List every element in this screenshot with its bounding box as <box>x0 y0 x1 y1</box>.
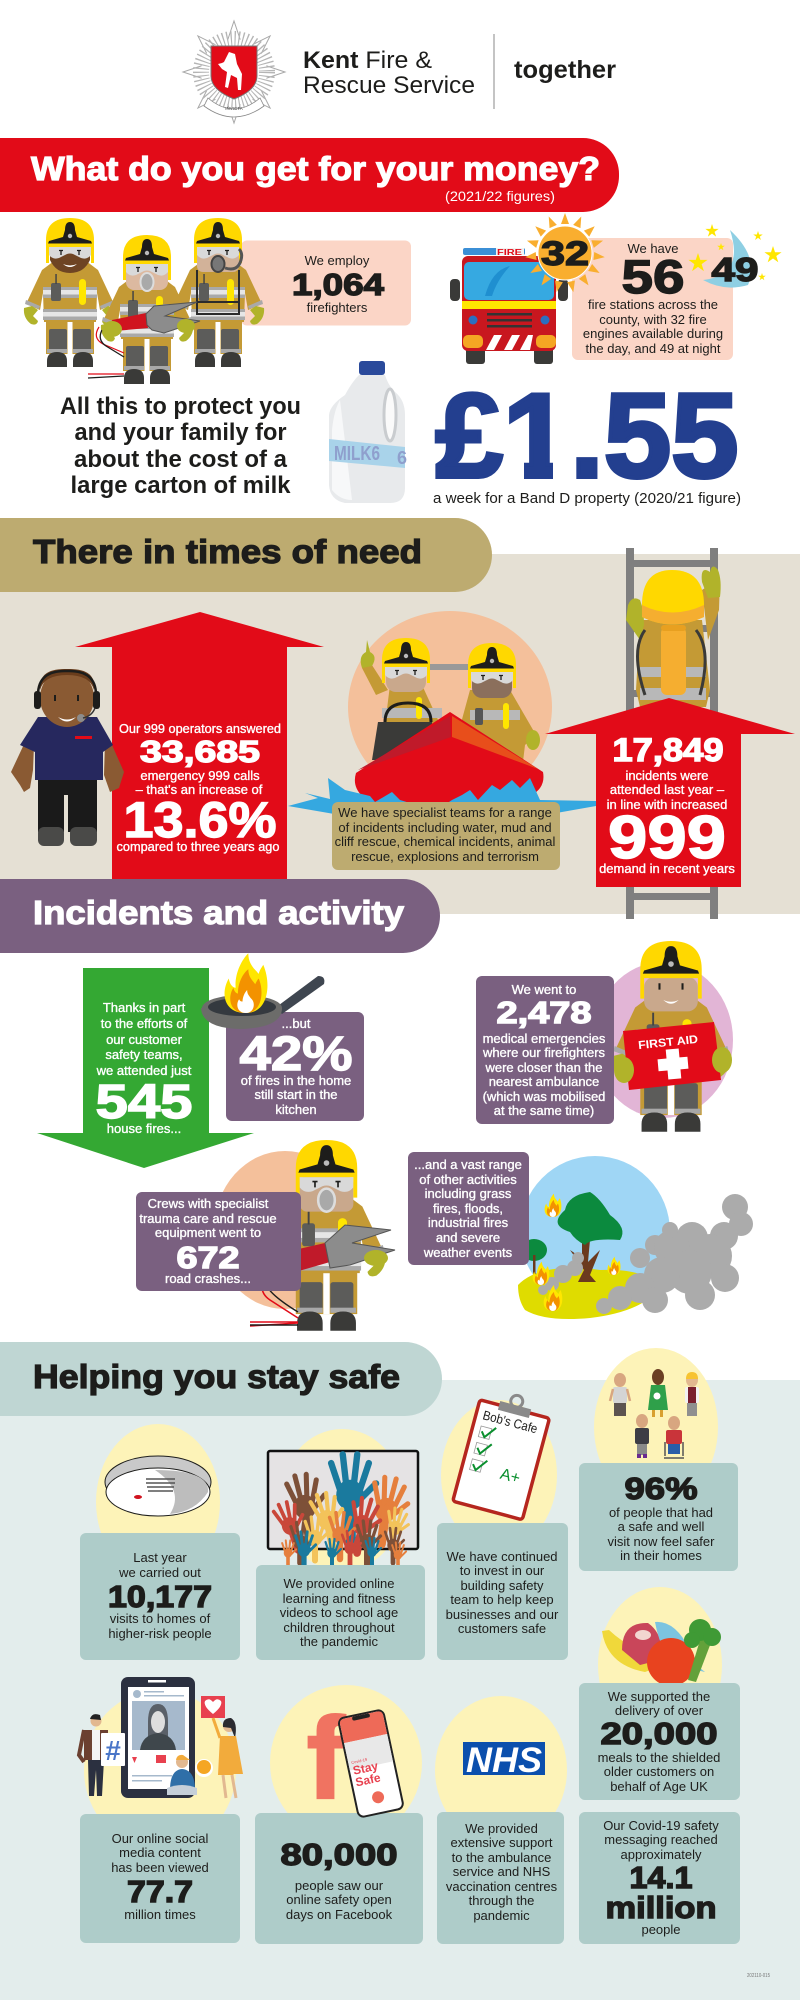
panel: facebook open days: people saw our <box>295 1878 384 1893</box>
red up arrow: 999 calls: emergency 999 calls <box>140 768 260 783</box>
icon: milk bottle: MILK6 <box>334 443 380 465</box>
panel: online learning: learning and fitness <box>283 1591 396 1606</box>
green down arrow: house fires: we attended just <box>96 1063 192 1078</box>
panel: other activities <box>408 1152 529 1265</box>
panel: road crashes: road crashes... <box>165 1271 251 1286</box>
heading banner: there in times of need <box>0 518 492 592</box>
panel: medical emergencies: medical emergencies <box>483 1031 606 1046</box>
panel: fire stations: 56 <box>622 250 684 303</box>
panel: NHS support: service and NHS <box>453 1864 551 1879</box>
panel: fire stations: We have <box>627 241 679 256</box>
text: protect your family: about the cost of a <box>74 446 288 473</box>
icon: phone showing Stay Safe: Safe <box>354 1770 382 1789</box>
logo divider <box>494 34 495 109</box>
icon: phone showing Stay Safe <box>338 1709 404 1818</box>
illustration: Facebook and phone <box>270 1685 422 1841</box>
panel: 42 percent of fires: 42% <box>240 1028 352 1081</box>
panel: medical emergencies: at the same time) <box>494 1103 594 1118</box>
panel: meals delivery: delivery of over <box>615 1703 704 1718</box>
illustration: NHS logo: NHS <box>466 1741 542 1780</box>
panel: online learning: children throughout <box>283 1620 395 1635</box>
panel: 42 percent of fires: kitchen <box>275 1102 317 1117</box>
panel: meals delivery: 20,000 <box>600 1716 718 1751</box>
logo crest <box>183 21 285 123</box>
panel: specialist teams: rescue, explosions and terrorism <box>351 849 539 864</box>
panel: smoke alarm visits <box>80 1533 240 1660</box>
panel: other activities: fires, floods, <box>433 1201 503 1216</box>
panel: online learning: the pandemic <box>300 1634 379 1649</box>
panel: Covid-19 messaging: million <box>606 1890 716 1925</box>
big figure: £1.55: £1.55 <box>436 369 738 503</box>
panel: building safety: customers safe <box>458 1621 546 1636</box>
panel: other activities: weather events <box>423 1245 513 1260</box>
text: protect your family: All this to protect you <box>60 393 301 420</box>
panel: smoke alarm visits: 10,177 <box>108 1579 212 1614</box>
illustration: firefighter with cutting equipment <box>250 1140 395 1331</box>
green down arrow: house fires: Thanks in part <box>103 1000 186 1015</box>
panel: meals delivery <box>579 1683 740 1800</box>
heading banner: incidents and activity <box>0 879 440 953</box>
tagline: together: together <box>514 56 616 84</box>
text: protect your family: and your family for <box>74 419 286 446</box>
panel: NHS support: We provided <box>465 1821 538 1836</box>
heading banner: incidents and activity: Incidents and activity <box>33 894 405 931</box>
panel: meals delivery: behalf of Age UK <box>610 1779 708 1794</box>
panel: road crashes: trauma care and rescue <box>139 1211 277 1226</box>
illustration: NHS logo <box>435 1696 567 1844</box>
icon: milk bottle <box>329 361 407 503</box>
panel: 42 percent of fires: still start in the <box>254 1087 338 1102</box>
heading banner: what do you get for your money <box>0 138 619 212</box>
panel: 42 percent of fires: ...but <box>282 1016 311 1031</box>
green down arrow: house fires: safety teams, <box>105 1047 183 1062</box>
panel: medical emergencies: nearest ambulance <box>489 1074 599 1089</box>
panel: firefighters count: 1,064 <box>292 267 385 302</box>
panel: NHS support: extensive support <box>451 1835 553 1850</box>
red up arrow: incidents attended: demand in recent years <box>599 861 735 876</box>
red up arrow: incidents attended: 999 <box>608 804 726 871</box>
panel: Covid-19 messaging: approximately <box>621 1847 702 1862</box>
red up arrow: 999 calls <box>75 612 324 880</box>
panel: meals delivery: meals to the shielded <box>598 1750 720 1765</box>
green down arrow: house fires: 545 <box>96 1076 192 1129</box>
road crash backdrop <box>214 1151 356 1309</box>
green down arrow: house fires: our customer <box>106 1032 183 1047</box>
illustration: peach circle backdrop <box>348 611 552 803</box>
panel: medical emergencies: We went to <box>512 982 576 997</box>
red up arrow: incidents attended: in line with increased <box>607 797 727 812</box>
panel: smoke alarm visits: visits to homes of <box>110 1611 211 1626</box>
logo wordmark: Rescue Service <box>303 72 475 99</box>
illustration: three firefighters with cutting tool <box>24 218 264 384</box>
illustration: screen with raised hands <box>268 1429 418 1571</box>
icon: moon and stars with 49 night engines <box>688 224 782 288</box>
panel: firefighters count <box>241 240 411 326</box>
panel: medical emergencies: were closer than the <box>484 1060 603 1075</box>
panel: facebook open days: days on Facebook <box>286 1907 393 1922</box>
red up arrow: 999 calls: 13.6% <box>124 792 276 848</box>
panel: road crashes: Crews with specialist <box>148 1196 269 1211</box>
panel: firefighters count: firefighters <box>307 300 368 315</box>
red up arrow: incidents attended: attended last year – <box>610 782 725 797</box>
illustration: group of people <box>594 1348 718 1506</box>
panel: facebook open days: 80,000 <box>280 1837 398 1872</box>
panel: Covid-19 messaging: Our Covid-19 safety <box>603 1818 719 1833</box>
logo wordmark <box>303 47 475 99</box>
icon: first aid box <box>614 1022 732 1090</box>
panel: NHS support: pandemic <box>473 1908 530 1923</box>
red up arrow: 999 calls: Our 999 operators answered <box>119 721 281 736</box>
panel: building safety: to invest in our <box>460 1563 545 1578</box>
panel: 42 percent of fires <box>226 1012 364 1121</box>
logo crest: INVICTA <box>225 106 243 111</box>
section background: there in times of need <box>0 554 800 914</box>
green down arrow: house fires <box>37 968 254 1168</box>
panel: Covid-19 messaging: 14.1 <box>630 1860 692 1895</box>
red up arrow: incidents attended: 17,849 <box>612 732 724 768</box>
panel: specialist teams <box>332 802 560 870</box>
panel: online learning <box>256 1565 425 1660</box>
illustration: social media phone and people: # <box>105 1735 121 1766</box>
red up arrow: incidents attended <box>545 698 795 887</box>
panel: safe and well visit: of people that had <box>609 1505 713 1520</box>
panel: online learning: videos to school age <box>280 1605 398 1620</box>
illustration: water splash <box>288 778 596 815</box>
panel: building safety: businesses and our <box>446 1607 559 1622</box>
panel: smoke alarm visits: Last year <box>133 1550 187 1565</box>
panel: social media: 77.7 <box>127 1874 193 1909</box>
illustration: smoke alarm <box>96 1424 220 1580</box>
illustration: social media phone and people <box>79 1677 243 1850</box>
text: protect your family: large carton of milk <box>70 472 291 499</box>
panel: medical emergencies: where our firefighters <box>482 1045 606 1060</box>
heading banner: helping you stay safe <box>0 1342 442 1416</box>
caption: band D: a week for a Band D property (2020/21 figure) <box>433 491 741 507</box>
logo wordmark: Kent Fire & <box>303 47 432 74</box>
illustration: clipboard for Bob's Cafe: A+ <box>498 1466 522 1487</box>
panel: safe and well visit: visit now feel safer <box>608 1534 715 1549</box>
illustration: clipboard for Bob's Cafe: Bob's Cafe <box>481 1407 539 1436</box>
panel: specialist teams: We have specialist teams for a range <box>338 805 552 820</box>
illustration: fire engine: FIRE <box>497 248 523 257</box>
illustration: firefighter climbing ladder <box>626 566 721 707</box>
panel: Covid-19 messaging: people <box>641 1922 681 1937</box>
panel: smoke alarm visits: higher-risk people <box>108 1626 212 1641</box>
panel: road crashes: 672 <box>176 1240 240 1275</box>
panel: other activities: including grass <box>425 1186 512 1201</box>
green down arrow: house fires: to the efforts of <box>101 1016 188 1031</box>
panel: NHS support: to the ambulance <box>452 1850 551 1865</box>
illustration: 999 operator <box>11 669 124 846</box>
panel: facebook open days: online safety open <box>286 1892 392 1907</box>
panel: building safety: team to help keep <box>450 1592 554 1607</box>
illustration: fire engine <box>450 248 568 364</box>
green down arrow: house fires: house fires... <box>107 1121 181 1136</box>
panel: smoke alarm visits: we carried out <box>118 1565 201 1580</box>
panel: other activities: and severe <box>436 1230 500 1245</box>
panel: road crashes <box>136 1192 301 1291</box>
panel: facebook open days <box>255 1813 423 1944</box>
panel: Covid-19 messaging <box>579 1812 740 1944</box>
illustration: rescue boat with two firefighters <box>355 638 543 808</box>
panel: fire stations: fire stations across the <box>588 297 718 312</box>
icon: sun with 32 day engines <box>525 213 605 293</box>
panel: specialist teams: cliff rescue, chemical incidents, animal <box>335 834 556 849</box>
illustration: clipboard for Bob's Cafe <box>441 1386 557 1550</box>
panel: safe and well visit <box>579 1463 738 1571</box>
panel: firefighters count: We employ <box>305 253 370 268</box>
panel: fire stations: county, with 32 fire <box>599 312 707 327</box>
section background: helping you stay safe <box>0 1380 800 2000</box>
panel: online learning: We provided online <box>283 1576 395 1591</box>
panel: fire stations: engines available during <box>583 326 723 341</box>
panel: safe and well visit: in their homes <box>620 1548 702 1563</box>
panel: NHS support <box>437 1812 564 1944</box>
red up arrow: 999 calls: 33,685 <box>140 734 260 769</box>
panel: Covid-19 messaging: messaging reached <box>604 1832 718 1847</box>
illustration: Facebook and phone: f <box>307 1693 346 1823</box>
text: protect your family <box>60 393 301 499</box>
icon: milk bottle: 6 <box>397 448 407 468</box>
icon: frying pan on fire <box>201 953 324 1029</box>
illustration: ladder <box>626 548 718 919</box>
panel: social media: million times <box>124 1907 196 1922</box>
panel: social media: has been viewed <box>111 1860 209 1875</box>
panel: 42 percent of fires: of fires in the home <box>241 1073 351 1088</box>
icon: moon and stars with 49 night engines: 49 <box>712 251 758 288</box>
panel: meals delivery: We supported the <box>608 1689 710 1704</box>
panel: other activities: ...and a vast range <box>414 1157 522 1172</box>
panel: other activities: of other activities <box>419 1172 517 1187</box>
panel: safe and well visit: 96% <box>624 1471 698 1506</box>
panel: medical emergencies: 2,478 <box>496 995 592 1030</box>
red up arrow: incidents attended: incidents were <box>625 768 709 783</box>
panel: fire stations: the day, and 49 at night <box>586 341 721 356</box>
red up arrow: 999 calls: – that's an increase of <box>136 782 263 797</box>
panel: fire stations <box>572 238 733 360</box>
panel: building safety <box>437 1523 568 1660</box>
icon: first aid box: FIRST AID <box>638 1034 699 1052</box>
illustration: grass fire landscape <box>518 1156 753 1319</box>
panel: NHS support: through the <box>469 1893 534 1908</box>
panel: medical emergencies <box>476 976 614 1124</box>
heading banner: there in times of need: There in times of need <box>33 533 422 570</box>
illustration: firefighter with first aid kit <box>612 941 730 1132</box>
panel: social media: Our online social <box>112 1831 209 1846</box>
icon: sun with 32 day engines: 32 <box>541 235 589 273</box>
panel: social media: media content <box>119 1845 201 1860</box>
icon: phone showing Stay Safe: Covid-19 <box>351 1757 368 1765</box>
panel: medical emergencies backdrop <box>593 962 733 1118</box>
panel: meals delivery: older customers on <box>604 1764 714 1779</box>
panel: social media <box>80 1814 240 1943</box>
document reference code: 202110-015 <box>747 1973 770 1979</box>
icon: phone showing Stay Safe: Stay <box>352 1759 380 1778</box>
panel: medical emergencies: (which was mobilised <box>483 1089 605 1104</box>
panel: other activities: industrial fires <box>428 1215 509 1230</box>
panel: specialist teams: of incidents including water, mud and <box>338 820 552 835</box>
heading banner: what do you get for your money: What do you get for your money? <box>31 150 600 187</box>
illustration: food <box>598 1587 722 1743</box>
heading banner: helping you stay safe: Helping you stay safe <box>33 1358 400 1395</box>
panel: road crashes: equipment went to <box>155 1225 261 1240</box>
panel: NHS support: vaccination centres <box>446 1879 558 1894</box>
red up arrow: 999 calls: compared to three years ago <box>116 839 280 854</box>
panel: building safety: We have continued <box>446 1549 558 1564</box>
panel: safe and well visit: a safe and well <box>618 1519 704 1534</box>
heading banner: what do you get for your money: (2021/22 figures) <box>445 188 555 204</box>
panel: building safety: building safety <box>460 1578 544 1593</box>
